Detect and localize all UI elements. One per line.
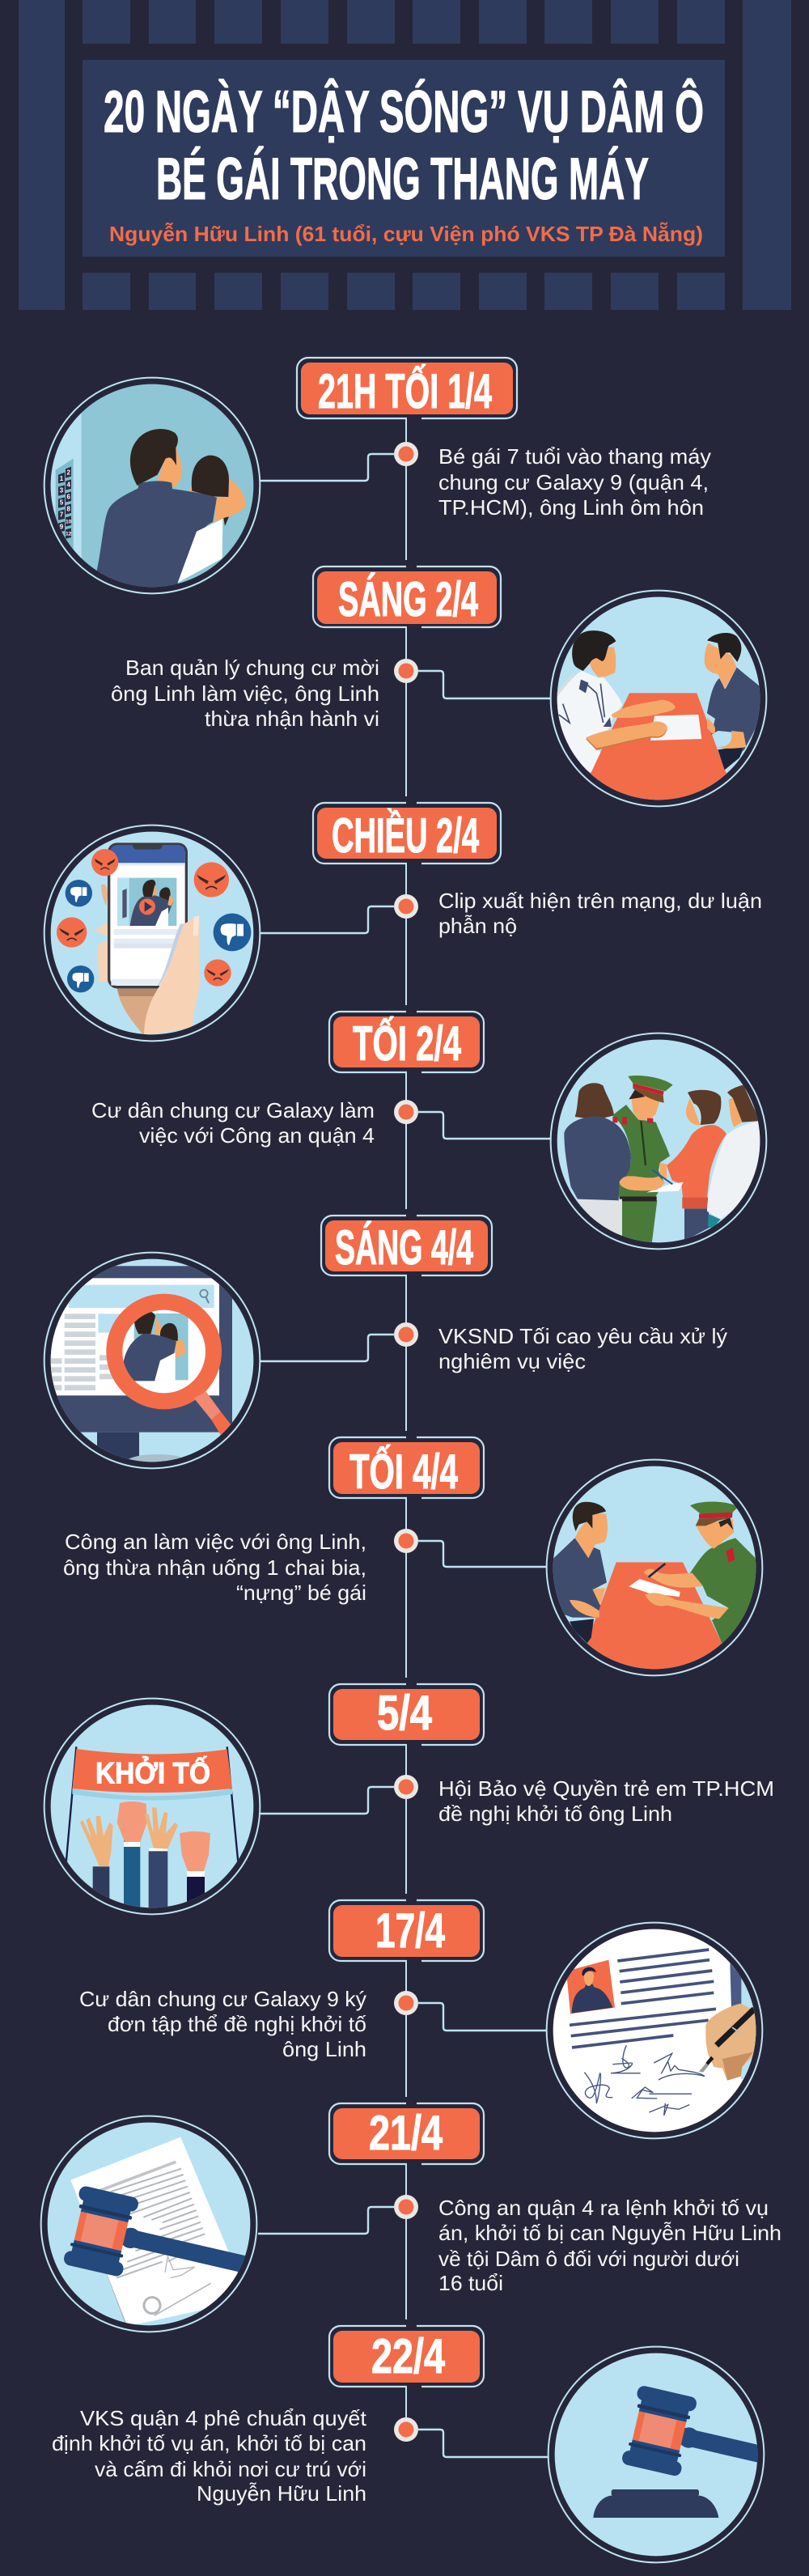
text: event 7 (438, 1776, 774, 1826)
text: event 2: Ban quản lý chung cư mời (125, 656, 379, 680)
icon: man hugging girl in elevator: 8 (66, 506, 70, 513)
badge: SÁNG 2/4 (313, 564, 501, 630)
text: event 10 (52, 2406, 367, 2506)
badge: SÁNG 4/4 (321, 1213, 492, 1278)
icon: man hugging girl in elevator: 12 (66, 532, 72, 537)
text: event 4 (91, 1098, 375, 1148)
subtitle: Nguyễn Hữu Linh (61 tuổi, cựu Viện phó VKS TP Đà Nẵng) (109, 222, 703, 246)
event dot 2 (394, 659, 418, 683)
text: event 9: về tội Dâm ô đối với người dưới (438, 2247, 739, 2271)
text: event 6 (63, 1530, 366, 1605)
text: event 9: án, khởi tố bị can Nguyễn Hữu Linh (438, 2221, 781, 2245)
badge: 22/4 (329, 2323, 484, 2389)
badge: 21/4 (329, 2101, 484, 2166)
event dot 4 (394, 1100, 418, 1124)
connector 4 (417, 1112, 551, 1139)
event dot 10 (394, 2417, 418, 2442)
text: event 10: định khởi tố vụ án, khởi tố bị can (52, 2431, 366, 2455)
connector 1 (260, 454, 395, 481)
timeline vertical line (405, 418, 407, 2430)
text: event 6: “nựng” bé gái (236, 1581, 366, 1605)
event dot 5 (394, 1322, 418, 1347)
badge: 21H TỐI 1/4 (297, 358, 517, 421)
connector 6 (417, 1541, 548, 1567)
badge: SÁNG 2/4: SÁNG 2/4 (338, 572, 478, 626)
badge: 17/4: 17/4 (375, 1903, 445, 1958)
text: event 4: việc với Công an quận 4 (139, 1123, 375, 1148)
event dot 3 (394, 894, 418, 919)
text: event 8: ông Linh (282, 2037, 366, 2061)
text: event 1: Bé gái 7 tuổi vào thang máy (438, 444, 711, 469)
icon: man hugging girl in elevator: 1 (60, 475, 64, 482)
text: event 7: đề nghị khởi tố ông Linh (438, 1802, 672, 1826)
text: event 10: Nguyễn Hữu Linh (197, 2481, 366, 2506)
text: event 5: nghiêm vụ việc (438, 1349, 586, 1373)
text: event 10: và cấm đi khỏi nơi cư trú với (95, 2457, 366, 2481)
icon: gavel and sound block (547, 2345, 765, 2564)
event dot 1 (394, 442, 418, 466)
event dot 7 (394, 1775, 418, 1799)
connector 2 (417, 671, 551, 698)
icon: officer taking statement (541, 1454, 768, 1681)
badge: TỐI 4/4: TỐI 4/4 (349, 1445, 458, 1499)
icon: man hugging girl in elevator: 7 (60, 511, 64, 519)
icon: man hugging girl in elevator: 4 (66, 482, 70, 489)
text: event 3: phẫn nộ (438, 914, 517, 938)
event dot 6 (394, 1529, 418, 1553)
text: event 3: Clip xuất hiện trên mạng, dư luận (438, 889, 762, 913)
badge: 21H TỐI 1/4: 21H TỐI 1/4 (318, 364, 492, 418)
badge: CHIỀU 2/4 (313, 800, 501, 866)
text: event 9: 16 tuổi (438, 2271, 503, 2295)
text: event 6: Công an làm việc với ông Linh, (65, 1530, 366, 1554)
badge: TỐI 2/4 (329, 1009, 484, 1075)
event dot 8 (394, 1991, 418, 2015)
text: event 10: VKS quận 4 phê chuẩn quyết (80, 2406, 367, 2430)
icon: phone with angry reactions (39, 820, 265, 1046)
icon: man hugging girl in elevator: 6 (66, 494, 70, 501)
header background bars (19, 0, 791, 310)
badge: TỐI 4/4 (329, 1435, 484, 1500)
icon: man hugging girl in elevator: 2 (66, 469, 70, 477)
text: event 1: TP.HCM), ông Linh ôm hôn (438, 495, 704, 520)
text: event 8: Cư dân chung cư Galaxy 9 ký (79, 1987, 366, 2011)
text: event 1: chung cư Galaxy 9 (quận 4, (438, 470, 709, 494)
connector 8 (417, 2003, 548, 2031)
text: event 2: ông Linh làm việc, ông Linh (111, 681, 379, 706)
badge: 5/4 (329, 1682, 484, 1747)
icon: man hugging girl in elevator: 9 (60, 523, 64, 530)
badge: 5/4: 5/4 (377, 1686, 433, 1740)
text: event 6: ông thừa nhận uống 1 chai bia, (63, 1555, 366, 1580)
icon: two men at a table (545, 585, 772, 812)
text: event 3 (438, 889, 762, 938)
badge: SÁNG 4/4: SÁNG 4/4 (335, 1220, 473, 1275)
icon: man hugging girl in elevator: 3 (60, 487, 64, 494)
badge: 17/4 (329, 1898, 484, 1963)
event dot 9 (394, 2195, 418, 2219)
text: event 9: Công an quận 4 ra lệnh khởi tố vụ (438, 2196, 769, 2220)
badge: 22/4: 22/4 (371, 2329, 445, 2383)
icon: man hugging girl in elevator: 5 (60, 499, 64, 507)
text: event 5: VKSND Tối cao yêu cầu xử lý (438, 1324, 727, 1348)
text: event 5 (438, 1324, 727, 1373)
connector 5 (260, 1335, 395, 1361)
text: event 8: đơn tập thể đề nghị khởi tố (108, 2012, 366, 2036)
icon: man hugging girl in elevator: 10 (66, 520, 72, 525)
icon: signed petition (541, 1917, 768, 2144)
panel: title block (83, 60, 725, 257)
badge: TỐI 2/4: TỐI 2/4 (353, 1016, 461, 1071)
icon: magnifier over news monitor (39, 1247, 265, 1474)
text: event 4: Cư dân chung cư Galaxy làm (91, 1098, 375, 1122)
connector 3 (260, 906, 395, 933)
connector 7 (260, 1787, 395, 1814)
icon: gavel on legal document (36, 2111, 268, 2337)
badge: 21/4: 21/4 (369, 2106, 443, 2160)
text: event 1 (438, 444, 711, 520)
connector 10 (417, 2430, 549, 2457)
icon: protest banner and raised hands: KHỞI TỐ (95, 1756, 210, 1790)
text: event 8 (79, 1987, 366, 2061)
icon: protest banner and raised hands (39, 1693, 265, 1920)
icon: man hugging girl in elevator (39, 372, 265, 599)
text: event 2: thừa nhận hành vi (205, 707, 379, 731)
text: event 9 (438, 2196, 781, 2295)
connector 9 (258, 2207, 395, 2234)
title (104, 79, 704, 212)
icon: residents with police officer (545, 1028, 772, 1254)
text: event 7: Hội Bảo vệ Quyền trẻ em TP.HCM (438, 1776, 774, 1801)
text: event 2 (111, 656, 379, 731)
badge: CHIỀU 2/4: CHIỀU 2/4 (332, 808, 479, 863)
